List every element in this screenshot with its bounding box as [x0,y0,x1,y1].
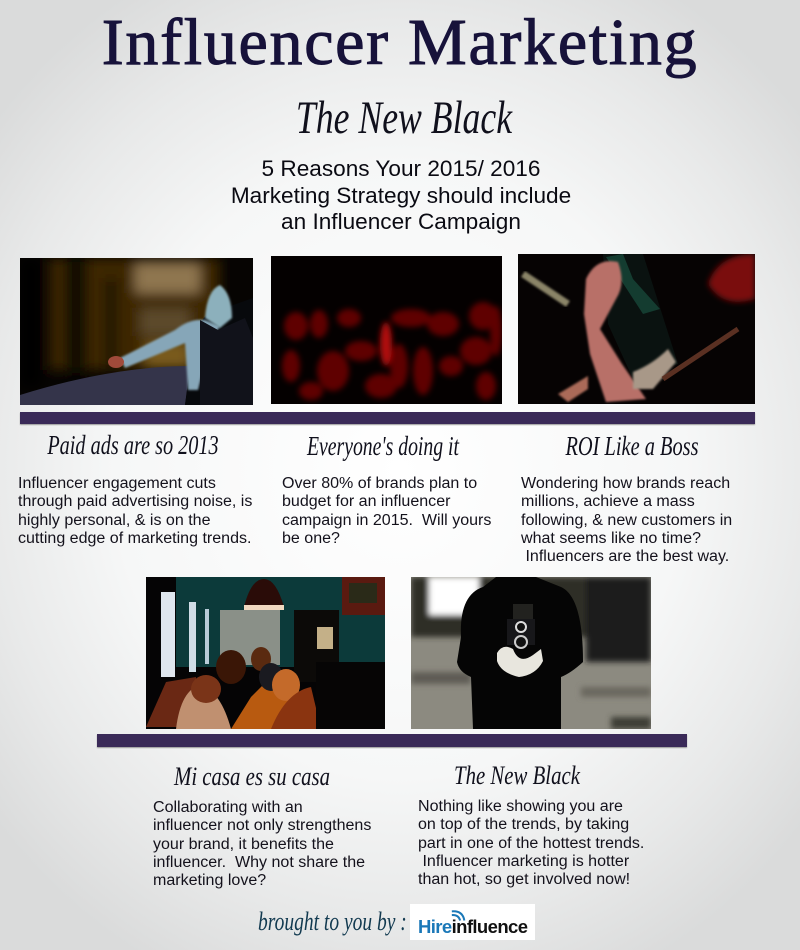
text: mi casa: your brand, it benefits the [153,835,334,853]
text: paid ads: cutting edge of marketing trends. [18,529,251,547]
column: paid ads [18,430,252,547]
text: everyone: Over 80% of brands plan to [282,474,477,492]
text: the new black: Nothing like showing you are [418,797,623,815]
heading: paid ads: Paid ads are so 2013 [47,430,219,460]
text: paid ads [18,474,252,547]
text: everyone: campaign in 2015. Will yours [282,511,491,529]
text: ROI: Wondering how brands reach [521,474,730,492]
subtitle: The New Black [296,92,512,144]
divider bar: top row [20,412,755,424]
text: everyone: be one? [282,529,340,547]
text: ROI: Influencers are the best way. [525,547,729,565]
text: mi casa: influencer. Why not share the [153,853,365,871]
heading: mi casa: Mi casa es su casa [174,762,330,791]
heading: 5 reasons: 5 Reasons Your 2015/ 2016 [262,156,540,181]
column: the new black [418,761,644,888]
icon: wifi signal [452,910,466,921]
photo: guitarist [518,254,755,404]
photo: hitchhiker [20,258,253,405]
text: mi casa: marketing love? [153,871,266,889]
heading: ROI: ROI Like a Boss [565,431,699,461]
heading: the new black: The New Black [454,761,580,790]
photo: restaurant [146,577,385,729]
column: everyone [282,431,491,547]
text: ROI: following, & new customers in [521,511,732,529]
text: everyone: budget for an influencer [282,492,450,510]
text: paid ads: through paid advertising noise, is [18,492,252,510]
column: mi casa [153,762,371,889]
text: mi casa: influencer not only strengthens [153,816,371,834]
text: mi casa [153,798,371,889]
logo wordmark: Hireinfluence [418,916,527,937]
text: everyone [282,474,491,547]
heading: 5 reasons [231,156,571,234]
logo: HireInfluence [410,904,535,940]
footer credit: brought to you by : [258,907,407,936]
title: Influencer Marketing [102,6,698,79]
heading: everyone: Everyone's doing it [307,431,459,461]
text: mi casa: Collaborating with an [153,798,303,816]
text: the new black: on top of the trends, by taking [418,815,629,833]
text: paid ads: Influencer engagement cuts [18,474,216,492]
photo: concert crowd [271,256,502,404]
column: ROI [521,431,732,565]
photo: camera man [411,577,651,729]
text: ROI: what seems like no time? [521,529,701,547]
text: the new black: than hot, so get involved now! [418,870,630,888]
text: paid ads: highly personal, & is on the [18,511,210,529]
heading: 5 reasons: an Influencer Campaign [281,209,521,234]
divider bar: bottom row [97,734,687,747]
text: ROI: millions, achieve a mass [521,492,695,510]
text: the new black: Influencer marketing is hotter [422,852,629,870]
text: the new black: part in one of the hottest trends. [418,834,644,852]
heading: 5 reasons: Marketing Strategy should include [231,182,571,208]
text: ROI [521,474,732,565]
text: the new black [418,797,644,888]
